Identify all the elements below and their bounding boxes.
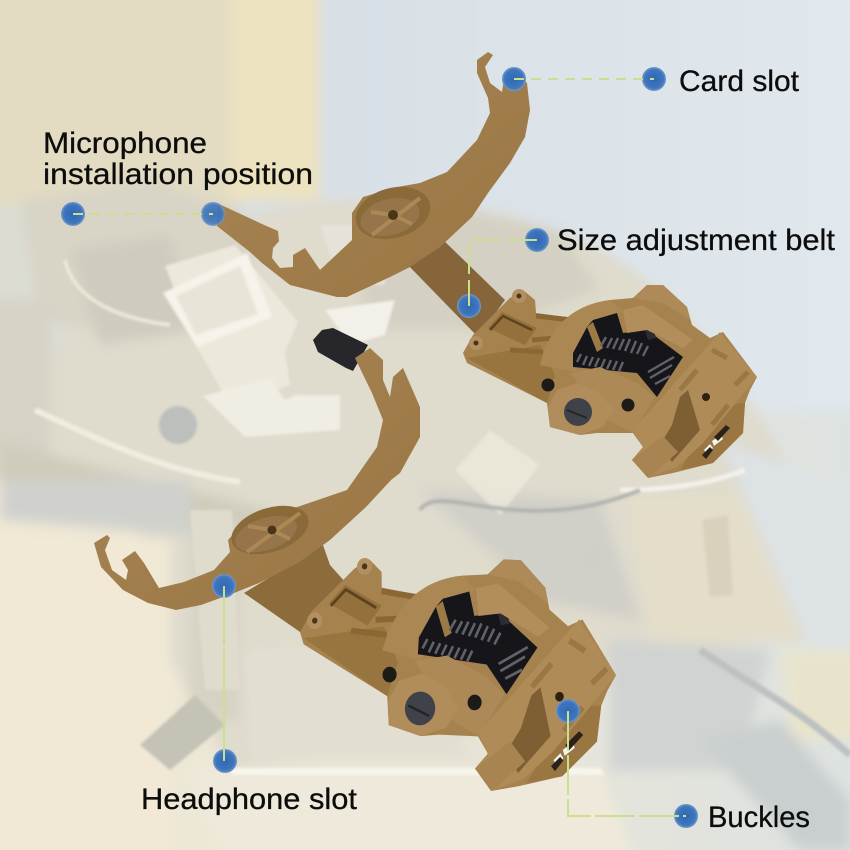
label: Card slot: [679, 65, 800, 98]
callout: headphone slot: [141, 574, 358, 816]
lower curved arm: [94, 348, 420, 610]
label: Size adjustment belt: [557, 224, 836, 257]
background: helmet details: [35, 225, 850, 775]
lower mechanism: [291, 550, 623, 796]
callout: card slot: [502, 65, 800, 98]
label: Microphone: [43, 127, 207, 160]
upper arm disc: [350, 179, 436, 247]
marker dots: [502, 67, 666, 91]
label: installation position: [43, 158, 313, 191]
marker dots: [61, 202, 225, 226]
marker dots: [457, 228, 549, 318]
marker dots: [212, 574, 237, 773]
upper arm stem: [405, 235, 505, 337]
left hook of upper arm: [217, 52, 530, 297]
black microphone cap: [313, 328, 368, 371]
label: Headphone slot: [141, 783, 358, 816]
callout leader lines: [73, 79, 686, 816]
callout: size adjustment belt: [457, 224, 836, 318]
upper mechanism: [463, 285, 757, 478]
upper mount: arm with card slot and microphone position: [217, 52, 757, 478]
marker dots: [556, 699, 698, 828]
callout: microphone installation position: [43, 127, 313, 226]
lower arm stem: [244, 545, 346, 632]
callout: buckles: [556, 699, 810, 834]
lower arm disc: [225, 497, 315, 563]
label: Buckles: [708, 801, 810, 834]
lower mount: arm with headphone slot and buckles: [94, 328, 623, 796]
